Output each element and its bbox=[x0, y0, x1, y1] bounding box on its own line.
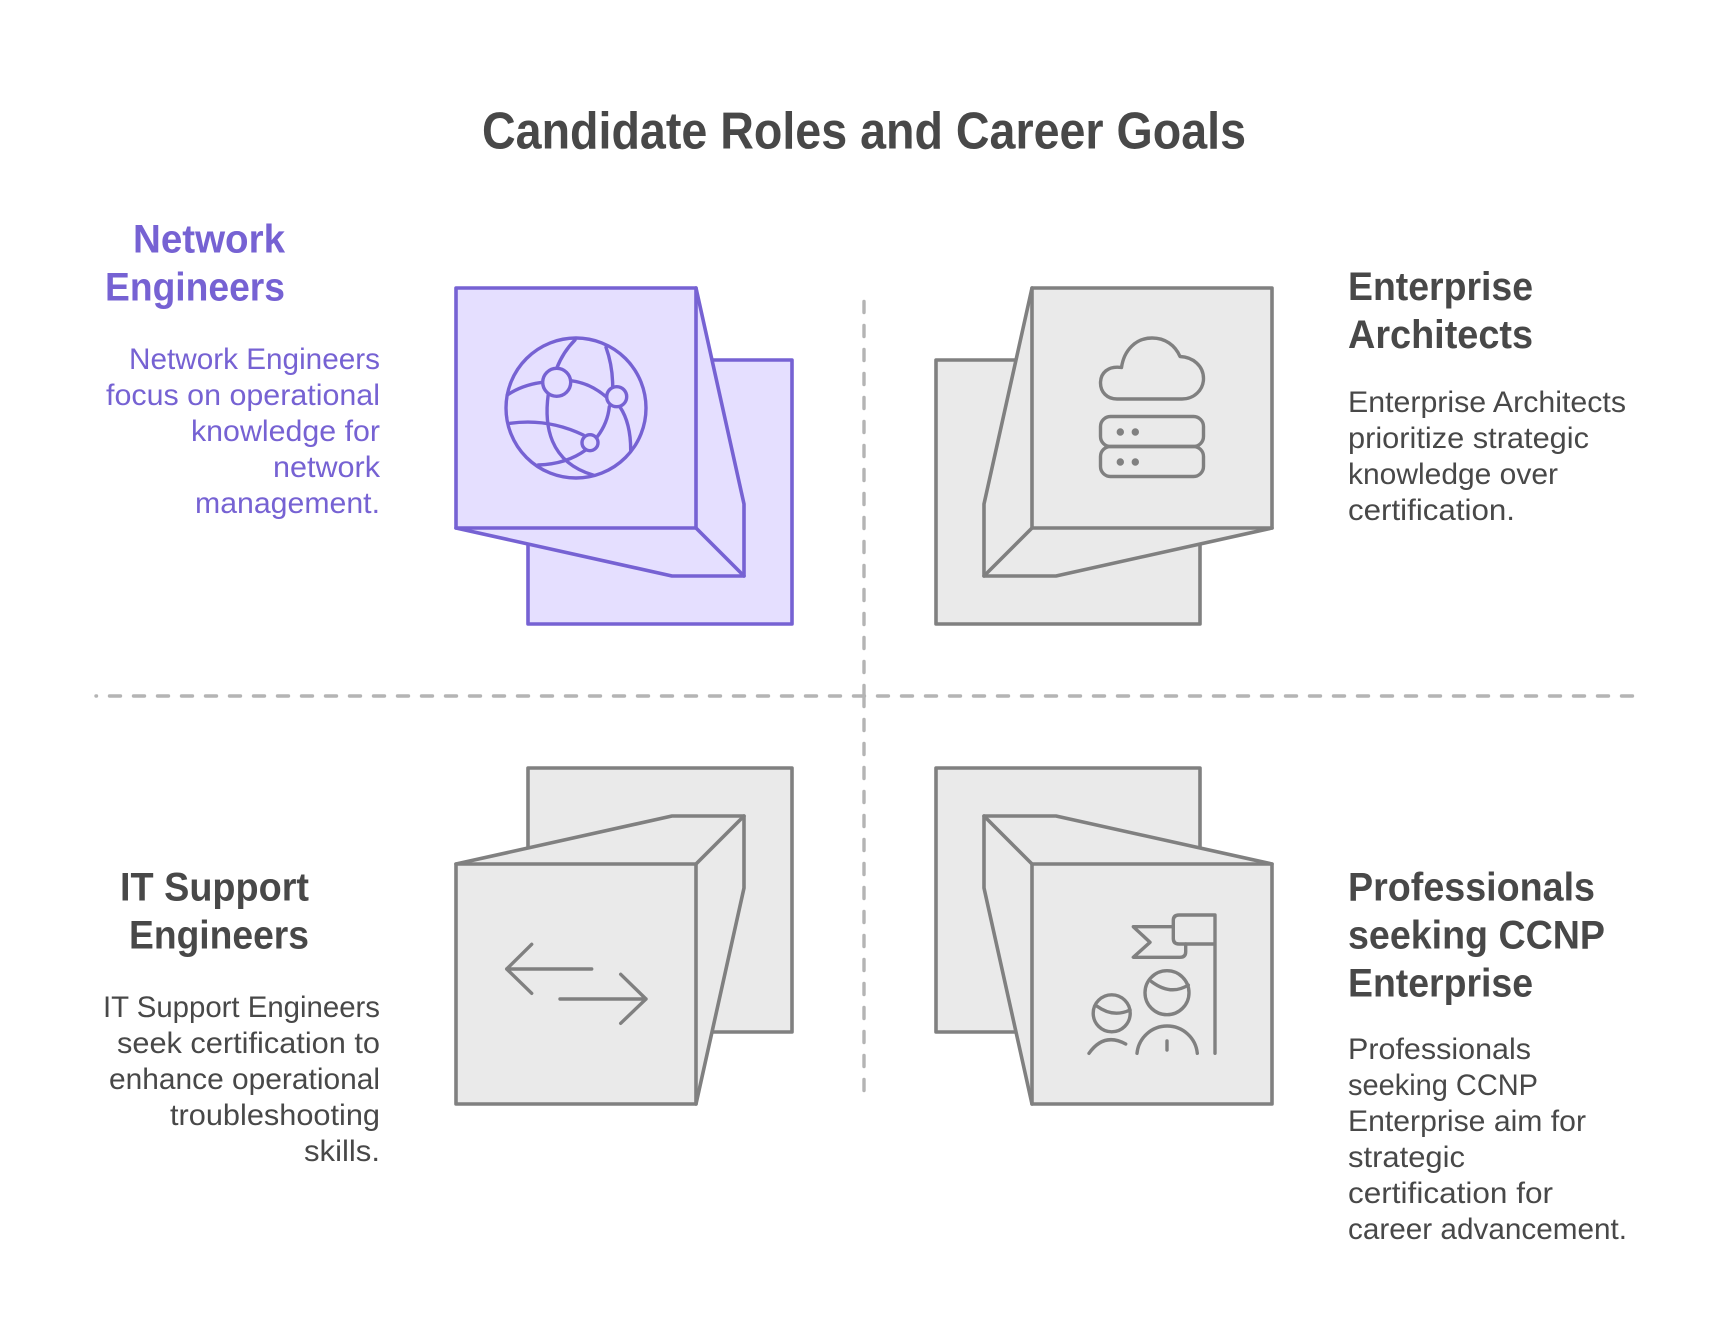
text: Network Engineers description: focus on operational bbox=[106, 379, 380, 412]
text: Professionals description: strategic bbox=[1348, 1141, 1465, 1174]
text: Professionals description bbox=[1348, 1033, 1627, 1246]
heading: IT Support Engineers: Engineers bbox=[129, 914, 309, 958]
text: Professionals description: career advancement. bbox=[1348, 1213, 1627, 1246]
text: Enterprise Architects description: certification. bbox=[1348, 494, 1515, 527]
text: Professionals description: seeking CCNP bbox=[1348, 1069, 1538, 1102]
icon: globe network bbox=[506, 338, 646, 478]
text: Enterprise Architects description: prioritize strategic bbox=[1348, 422, 1589, 455]
heading: Professionals seeking CCNP Enterprise: Enterprise bbox=[1348, 962, 1533, 1006]
text: Network Engineers description bbox=[106, 343, 381, 520]
panel: Professionals seeking CCNP Enterprise bbox=[936, 768, 1627, 1246]
text: Professionals description: Enterprise aim for bbox=[1348, 1105, 1586, 1138]
heading: Professionals seeking CCNP Enterprise: Professionals bbox=[1348, 866, 1595, 910]
text: IT Support Engineers description: seek certification to bbox=[117, 1027, 380, 1060]
panel: Enterprise Architects bbox=[936, 265, 1626, 624]
text: Enterprise Architects description bbox=[1348, 386, 1626, 527]
text: Network Engineers description: management. bbox=[195, 487, 380, 520]
graphic: grey cube with cloud server icon bbox=[936, 288, 1272, 624]
heading: IT Support Engineers bbox=[120, 866, 309, 958]
text: Network Engineers description: network bbox=[273, 451, 381, 484]
panel: IT Support Engineers bbox=[103, 768, 792, 1168]
icon: opposing arrows bbox=[507, 944, 646, 1023]
text: Professionals description: certification for bbox=[1348, 1177, 1553, 1210]
heading: Enterprise Architects: Enterprise bbox=[1348, 265, 1533, 309]
heading: Professionals seeking CCNP Enterprise: seeking CCNP bbox=[1348, 914, 1605, 958]
heading: Enterprise Architects bbox=[1348, 265, 1533, 357]
text: Network Engineers description: Network Engineers bbox=[129, 343, 380, 376]
heading: Network Engineers: Network bbox=[133, 218, 286, 262]
heading: IT Support Engineers: IT Support bbox=[120, 866, 309, 910]
text: IT Support Engineers description: enhance operational bbox=[109, 1063, 380, 1096]
text: IT Support Engineers description: IT Support Engineers bbox=[103, 991, 380, 1024]
icon: people with flag bbox=[1089, 915, 1215, 1053]
heading: Network Engineers bbox=[105, 218, 286, 310]
text: Network Engineers description: knowledge for bbox=[191, 415, 380, 448]
graphic: grey cube with team and flag icon bbox=[936, 768, 1272, 1104]
text: Enterprise Architects description: Enterprise Architects bbox=[1348, 386, 1626, 419]
graphic: purple cube with globe icon bbox=[456, 288, 792, 624]
graphic: grey cube with arrows icon bbox=[456, 768, 792, 1104]
text: Enterprise Architects description: knowledge over bbox=[1348, 458, 1558, 491]
title: Candidate Roles and Career Goals bbox=[482, 102, 1246, 160]
heading: Professionals seeking CCNP Enterprise bbox=[1348, 866, 1605, 1006]
text: Professionals description: Professionals bbox=[1348, 1033, 1531, 1066]
heading: Network Engineers: Engineers bbox=[105, 266, 285, 310]
text: IT Support Engineers description bbox=[103, 991, 380, 1168]
icon: cloud and server bbox=[1100, 338, 1204, 476]
text: IT Support Engineers description: skills. bbox=[304, 1135, 380, 1168]
heading: Enterprise Architects: Architects bbox=[1348, 313, 1533, 357]
text: IT Support Engineers description: troubleshooting bbox=[170, 1099, 380, 1132]
panel: Network Engineers bbox=[105, 218, 792, 624]
divider: vertical dashed line bbox=[862, 302, 866, 1091]
divider: horizontal dashed line bbox=[96, 694, 1633, 698]
